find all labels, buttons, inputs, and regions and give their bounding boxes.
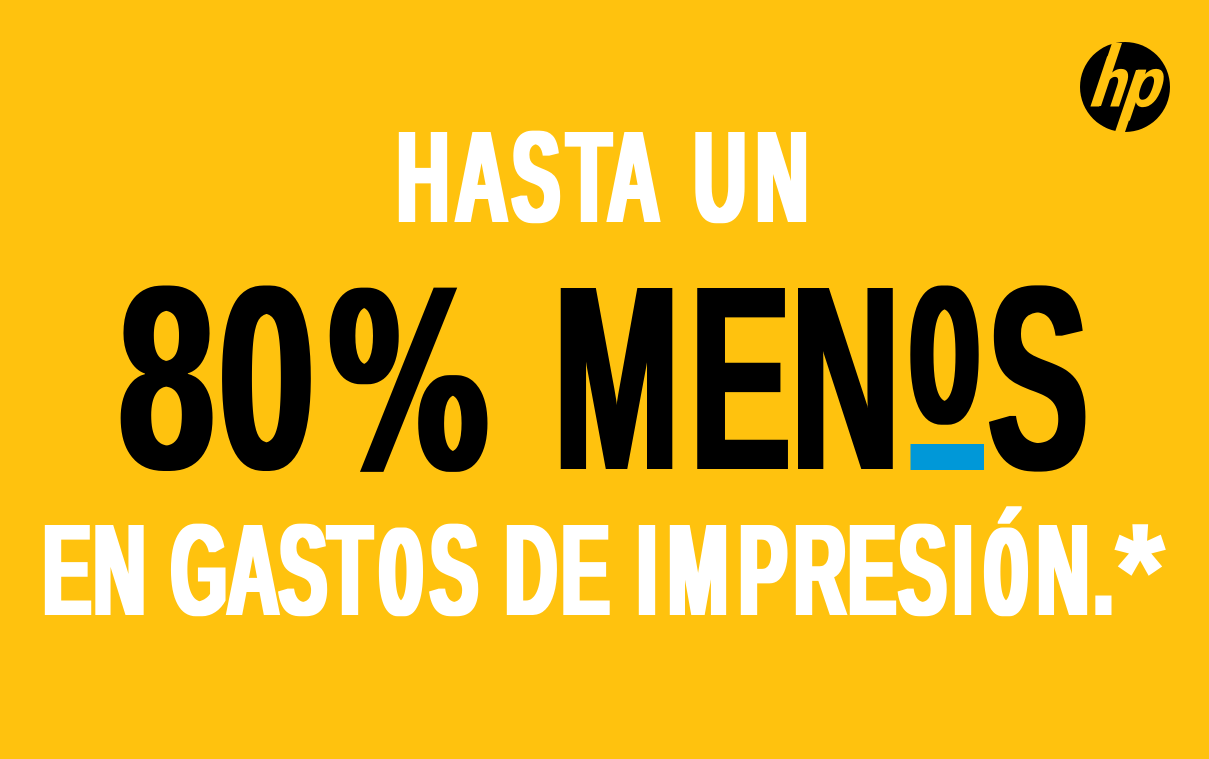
heading: first line: HASTA <box>397 104 660 250</box>
heading: first line: UN <box>694 104 808 250</box>
accent: blue underline bar <box>910 444 984 470</box>
heading: third line: EN <box>43 497 146 643</box>
word: menos: S <box>988 232 1088 525</box>
footnote asterisk: * <box>1116 499 1165 644</box>
heading: third line: DE <box>505 497 610 643</box>
heading: third line <box>43 497 1113 655</box>
percentage figure: 80% <box>118 233 490 526</box>
heading: first line <box>397 104 808 250</box>
word: menos: O <box>909 253 980 485</box>
icon: HP logo: hp <box>1082 44 1178 121</box>
headline: 80% MENOS <box>118 232 1088 526</box>
word: menos: MEN <box>554 232 900 525</box>
heading: third line: IMPRESIÓN. <box>637 497 1113 655</box>
heading: third line: GASTOS <box>171 497 478 655</box>
